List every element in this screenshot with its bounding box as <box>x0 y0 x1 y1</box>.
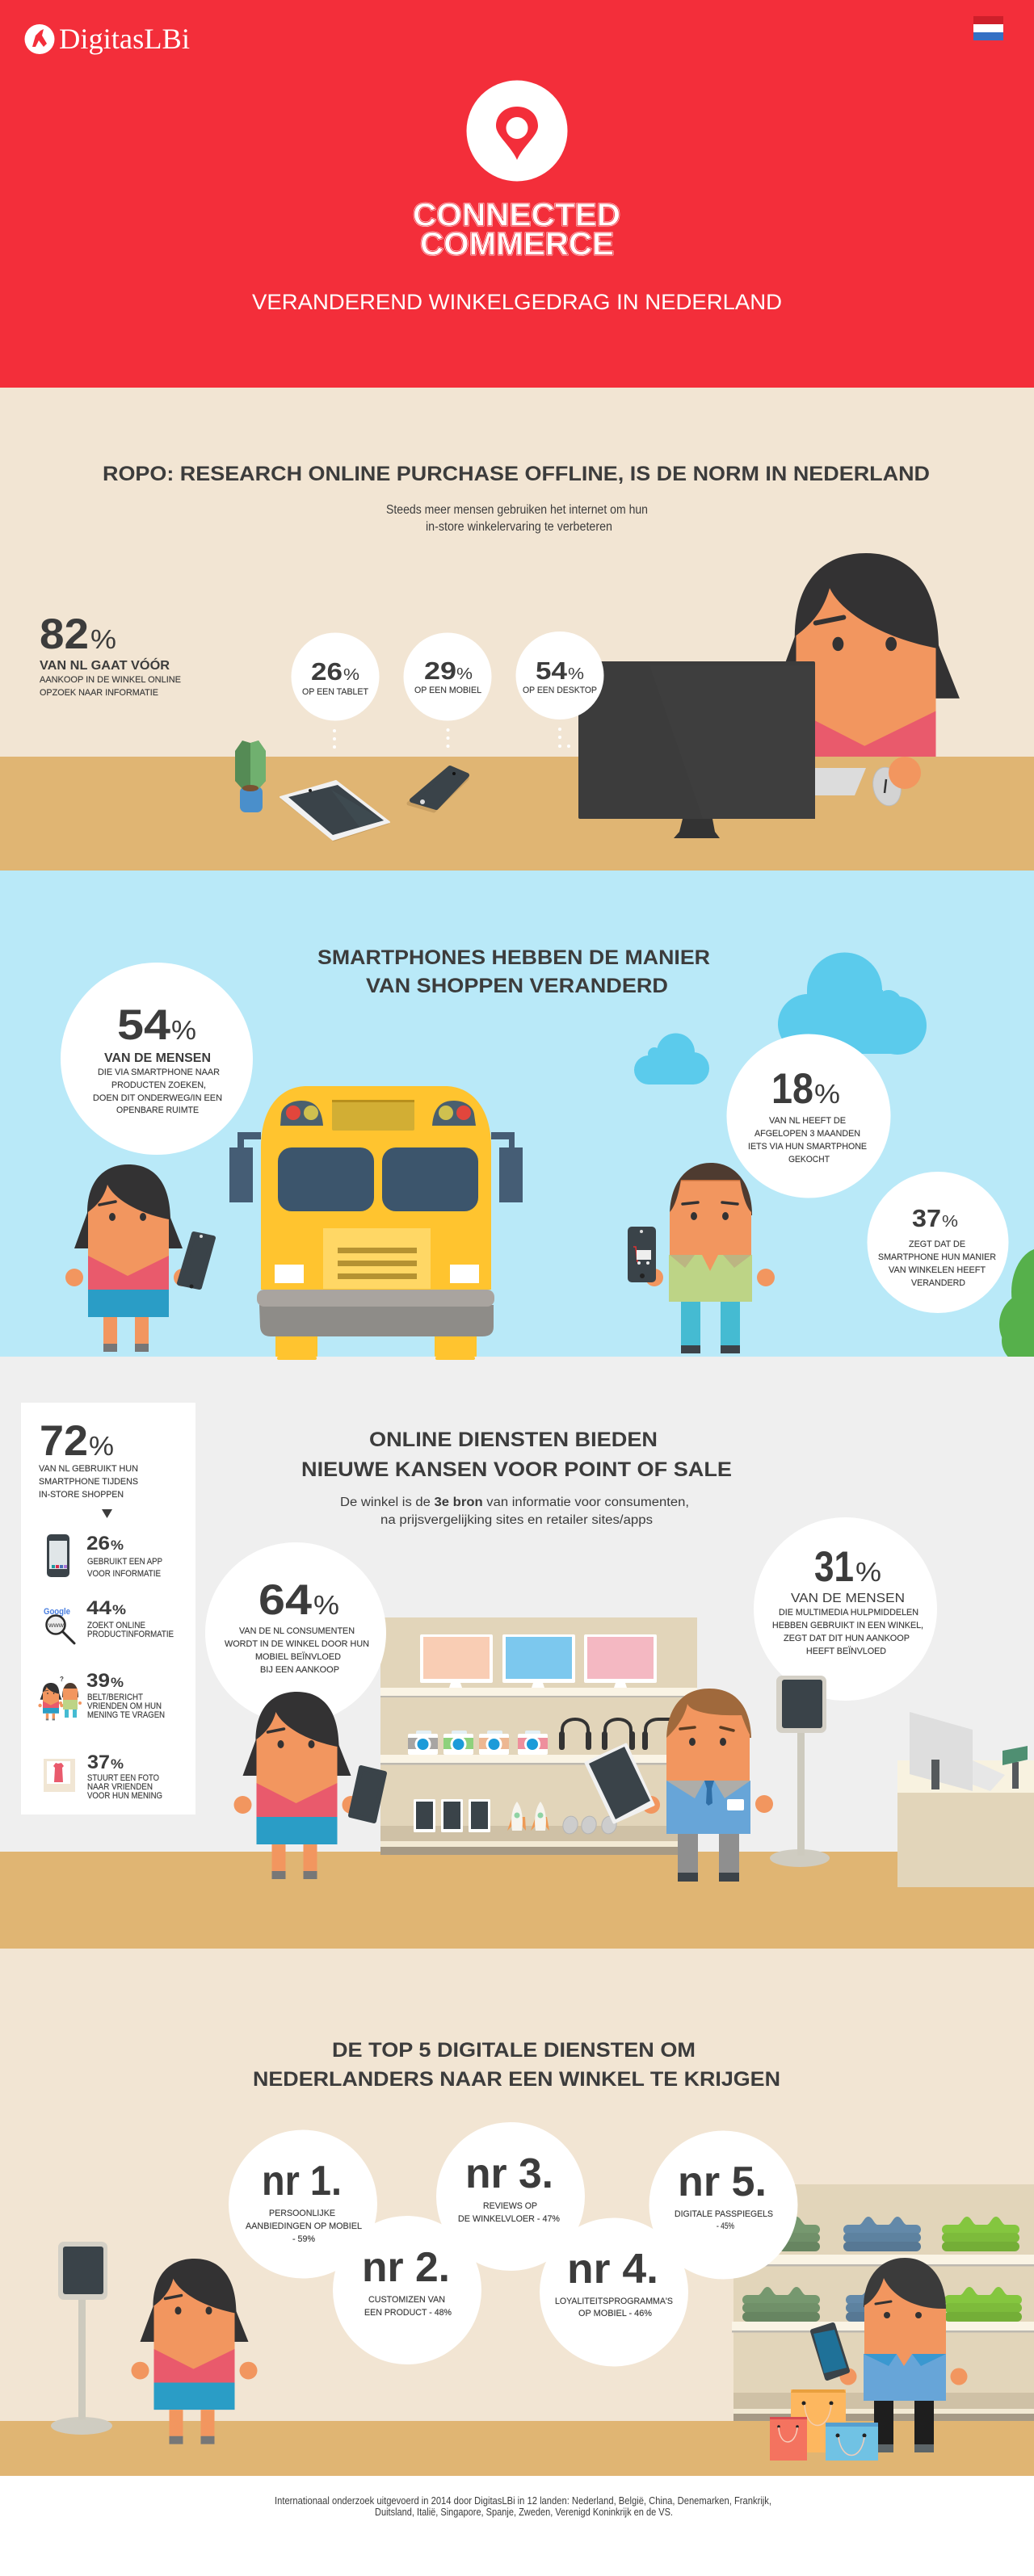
stat: 26% app: GEBRUIKT EEN APP <box>87 1557 162 1567</box>
stat: 72%: IN-STORE SHOPPEN <box>39 1490 124 1500</box>
illustration: woman with phone <box>234 1692 385 1879</box>
stat: 82%: VAN NL GAAT VÓÓR <box>40 658 170 673</box>
stat: 39%: % <box>111 1675 124 1690</box>
section: top 5 <box>0 1949 1034 2476</box>
illustration: woman with phone <box>65 1164 213 1352</box>
bubble: nr 4: LOYALITEITSPROGRAMMA'S <box>555 2297 673 2306</box>
title: Connected Commerce: COMMERCE <box>420 226 614 262</box>
intro text <box>340 1496 689 1527</box>
bubble: nr 3: nr 3. <box>465 2150 553 2197</box>
icon: tablet <box>280 781 389 841</box>
arrow down <box>102 1509 112 1518</box>
stat: 82%: OPZOEK NAAR INFORMATIE <box>40 688 158 698</box>
stat bubble: 31%: DIE MULTIMEDIA HULPMIDDELEN <box>779 1608 918 1617</box>
product: headphones <box>559 1719 672 1750</box>
stat bubble: 54% van de mensen: DOEN DIT ONDERWEG/IN EEN <box>93 1093 222 1103</box>
intro text <box>386 503 648 534</box>
bus wheels overlap <box>277 1357 475 1360</box>
stat: 26% app: VOOR INFORMATIE <box>87 1569 161 1579</box>
stat bubble: 29% mobiel: % <box>456 665 473 683</box>
stat: 37% foto <box>87 1752 162 1801</box>
product: monitors <box>420 1634 657 1688</box>
stat: 44%: ZOEKT ONLINE <box>87 1621 145 1630</box>
stat bubble: 37%: 37 <box>912 1204 941 1232</box>
heading: smartphones <box>317 946 710 997</box>
stat bubble: 64%: 64 <box>258 1576 313 1624</box>
stat: 39%: VRIENDEN OM HUN <box>87 1701 162 1711</box>
stat bubble: 31%: 31 <box>814 1543 854 1591</box>
title: Connected Commerce: COMMERCE <box>420 226 614 262</box>
bubble: nr 4 <box>540 2217 688 2366</box>
stat: 82%: AANKOOP IN DE WINKEL ONLINE <box>40 675 181 685</box>
icon: smartphone <box>409 768 467 811</box>
title: Connected Commerce: CONNECTED <box>413 197 620 233</box>
bubble: nr 2 <box>333 2216 481 2364</box>
stat bubble: 37% <box>868 1172 1008 1313</box>
product: rockets <box>507 1802 549 1831</box>
subtitle: VERANDEREND WINKELGEDRAG IN NEDERLAND <box>252 290 782 314</box>
footer <box>0 2476 1034 2576</box>
stat: 72%: % <box>89 1431 114 1461</box>
section: ROPO <box>0 388 1034 871</box>
icon: small cloud <box>634 1034 709 1085</box>
stat: 37% foto: % <box>111 1756 124 1772</box>
stat: 44%: % <box>112 1602 126 1617</box>
stat bubble: 29% mobiel <box>404 633 491 720</box>
stat: 82% <box>40 610 181 698</box>
stat: 39%: MENING TE VRAGEN <box>87 1710 165 1720</box>
stat bubble: 31%: HEBBEN GEBRUIKT IN EEN WINKEL, <box>772 1621 923 1630</box>
stat bubble: 64%: % <box>313 1590 339 1620</box>
stat: 37% foto: 37 <box>87 1752 110 1773</box>
illustration: woman <box>131 2259 257 2444</box>
icon: large cloud <box>778 953 927 1055</box>
footer: Duitsland, Italië, Singapore, Spanje, Zweden, Verenigd Koninkrijk en de VS. <box>375 2506 673 2518</box>
stat: 37% foto: VOOR HUN MENING <box>87 1791 162 1801</box>
floor <box>0 2421 1034 2476</box>
stat bubble: 18%: IETS VIA HUN SMARTPHONE <box>748 1142 867 1152</box>
icon: couple <box>38 1676 82 1720</box>
icon: phone with cart <box>628 1227 656 1282</box>
bubble: nr 2: nr 2. <box>362 2244 450 2291</box>
bubble: nr 5: - 45% <box>717 2221 734 2231</box>
stat bubble: 31%: HEEFT BEÏNVLOED <box>806 1647 886 1656</box>
desk <box>0 757 1034 871</box>
illustration: keyboard, mouse, hand <box>808 757 921 808</box>
stat: 26% app <box>86 1533 162 1579</box>
stat bubble: 64%: WORDT IN DE WINKEL DOOR HUN <box>225 1639 369 1649</box>
clothing stacks bottom <box>742 2287 1022 2322</box>
bus headlights <box>275 1265 479 1283</box>
heading: top 5 <box>253 2039 780 2091</box>
stat: 72%: 72 <box>40 1417 88 1465</box>
icon: photo of dress <box>44 1759 75 1792</box>
icon: google search <box>44 1607 74 1643</box>
icon: phone held <box>179 1234 213 1289</box>
icon: location pin <box>467 81 567 181</box>
stat bubble: 26% tablet <box>291 633 380 720</box>
stat bubble: 64%: BIJ EEN AANKOOP <box>260 1665 339 1675</box>
stat bubble: 54% desktop <box>515 631 604 720</box>
stat: 39% <box>86 1670 165 1720</box>
stat bubble: 54% van de mensen: PRODUCTEN ZOEKEN, <box>111 1080 206 1090</box>
bus wheels <box>275 1324 477 1360</box>
bubble: nr 3: REVIEWS OP <box>483 2201 537 2211</box>
stat bubble: 37%: VERANDERD <box>911 1278 965 1288</box>
clothing stacks top <box>742 2217 1019 2251</box>
bubble: nr 3: DE WINKELVLOER - 47% <box>458 2214 560 2224</box>
illustration: man with phone <box>628 1163 775 1353</box>
intro text: Steeds meer mensen gebruiken het internet om hun <box>386 503 648 517</box>
illustration: clothing shelves <box>732 2184 1034 2421</box>
stat bubble: 54% van de mensen: % <box>171 1015 196 1045</box>
bubble: nr 5: nr 5. <box>678 2159 767 2205</box>
stat: 44%: PRODUCTINFORMATIE <box>87 1630 174 1639</box>
side panel: 72% <box>21 1403 195 1815</box>
stat bubble: 18%: AFGELOPEN 3 MAANDEN <box>754 1129 860 1139</box>
section: header <box>0 0 1034 388</box>
bubble: nr 1: AANBIEDINGEN OP MOBIEL <box>246 2221 362 2231</box>
stat bubble: 54% van de mensen: VAN DE MENSEN <box>104 1051 211 1065</box>
illustration: checkout counter <box>897 1712 1034 1887</box>
stat: 37% foto: NAAR VRIENDEN <box>87 1782 153 1792</box>
stat bubble: 37%: ZEGT DAT DE <box>909 1240 965 1249</box>
icon: google search: www <box>48 1622 64 1629</box>
icon: phone <box>813 2325 847 2378</box>
illustration: store shelves <box>380 1617 697 1855</box>
stat bubble: 29% mobiel: OP EEN MOBIEL <box>414 686 481 695</box>
icon: google search: Google <box>44 1607 70 1617</box>
stat bubble: 31%: % <box>855 1557 881 1587</box>
stat bubble: 64% <box>205 1542 386 1723</box>
illustration: man with phone and shopping bags <box>770 2258 968 2461</box>
stat: 72%: SMARTPHONE TIJDENS <box>39 1477 138 1487</box>
intro text: na prijsvergelijking sites en retailer sites/apps <box>380 1513 653 1527</box>
product: mice <box>561 1815 619 1836</box>
icon: shopping bags <box>770 2389 878 2461</box>
stat: 44%: 44 <box>86 1597 112 1619</box>
stat bubble: 54% desktop: OP EEN DESKTOP <box>523 686 597 695</box>
illustration: kiosk <box>51 2242 112 2435</box>
heading: smartphones: VAN SHOPPEN VERANDERD <box>366 975 668 997</box>
icon: phone app <box>47 1534 69 1577</box>
icon: Dutch flag <box>973 16 1003 40</box>
illustration: salesman with tablet <box>586 1689 773 1882</box>
product: cameras <box>408 1731 548 1755</box>
icon: cactus <box>235 740 266 812</box>
stat: 82%: % <box>90 624 116 654</box>
stat bubble: 37%: SMARTPHONE HUN MANIER <box>878 1252 996 1262</box>
footer: Internationaal onderzoek uitgevoerd in 2014 door DigitasLBi in 12 landen: Nederland, België, China, Denemarken, Frankrijk, <box>275 2494 771 2507</box>
bus windows <box>278 1147 478 1211</box>
bubble: nr 1 <box>229 2130 377 2279</box>
stat bubble: 64%: MOBIEL BEÏNVLOED <box>255 1652 341 1662</box>
bus mirrors <box>229 1132 523 1202</box>
stat bubble: 54% desktop: 54 <box>536 657 568 685</box>
illustration: school bus <box>229 1086 523 1360</box>
icon: couple: ? <box>60 1676 64 1683</box>
icon: phone held <box>351 1768 385 1821</box>
stat bubble: 31%: ZEGT DAT DIT HUN AANKOOP <box>784 1634 910 1643</box>
icon: tablet held <box>586 1744 654 1823</box>
stat bubble: 54% van de mensen <box>61 963 253 1155</box>
stat bubble: 18%: VAN NL HEEFT DE <box>769 1116 846 1126</box>
bubble: nr 5: DIGITALE PASSPIEGELS <box>675 2209 773 2219</box>
stat bubble: 26% tablet: % <box>343 666 359 684</box>
stat bubble: 26% tablet: OP EEN TABLET <box>302 687 368 697</box>
stat bubble: 31%: VAN DE MENSEN <box>791 1592 905 1605</box>
stat bubble: 31% <box>754 1517 937 1701</box>
logo: DigitasLBi: DigitasLBi <box>59 23 190 55</box>
section: smartphones <box>0 871 1034 1365</box>
stat: 26% app: 26 <box>86 1533 110 1554</box>
stat bubble: 64%: VAN DE NL CONSUMENTEN <box>239 1626 355 1636</box>
bubble: nr 2: EEN PRODUCT - 48% <box>364 2308 452 2318</box>
bubble: nr 2: CUSTOMIZEN VAN <box>368 2295 445 2305</box>
intro text: De winkel is de 3e bron van informatie voor consumenten, <box>340 1496 689 1509</box>
stat bubble: 37%: VAN WINKELEN HEEFT <box>889 1265 986 1275</box>
product: tablets <box>414 1799 490 1832</box>
heading: online diensten <box>301 1429 732 1481</box>
bubble: nr 4: OP MOBIEL - 46% <box>578 2309 652 2318</box>
heading: top 5: NEDERLANDERS NAAR EEN WINKEL TE KRIJGEN <box>253 2068 780 2091</box>
bus lights top <box>280 1101 476 1126</box>
stat: 82%: 82 <box>40 610 89 658</box>
title: Connected Commerce <box>413 197 620 262</box>
bus body <box>261 1086 491 1290</box>
stat bubble: 18%: 18 <box>771 1065 813 1113</box>
stat: 72%: VAN NL GEBRUIKT HUN <box>39 1464 138 1474</box>
illustration: kiosk <box>770 1676 830 1867</box>
icon: bush <box>999 1248 1034 1365</box>
bus grille <box>323 1228 431 1289</box>
title: Connected Commerce: CONNECTED <box>413 197 620 233</box>
stat bubble: 29% mobiel: 29 <box>424 657 456 685</box>
bus bumper <box>257 1290 494 1336</box>
heading: smartphones: SMARTPHONES HEBBEN DE MANIER <box>317 946 710 969</box>
heading: online diensten: NIEUWE KANSEN VOOR POINT OF SALE <box>301 1458 732 1481</box>
bubble: nr 3 <box>436 2122 585 2271</box>
stat: 39%: BELT/BERICHT <box>87 1693 143 1702</box>
stat: 26% app: % <box>111 1538 124 1553</box>
stat: 39%: 39 <box>86 1670 110 1692</box>
stat bubble: 54% van de mensen: 54 <box>117 1001 171 1049</box>
stat bubble: 18%: GEKOCHT <box>788 1155 830 1164</box>
stat bubble: 26% tablet: 26 <box>311 657 343 686</box>
intro text: in-store winkelervaring te verbeteren <box>426 520 612 534</box>
stat bubble: 54% desktop: % <box>568 665 584 683</box>
stat: 72% <box>39 1417 138 1500</box>
bubble: nr 1: - 59% <box>292 2234 315 2244</box>
stat bubble: 18%: % <box>814 1079 840 1109</box>
floor <box>0 1852 1034 1949</box>
heading: ROPO: ROPO: RESEARCH ONLINE PURCHASE OFFLINE, IS DE NORM IN NEDERLAND <box>103 463 930 485</box>
section: online diensten <box>0 1357 1034 1949</box>
stat bubble: 37%: % <box>942 1213 958 1231</box>
bubble: nr 5 <box>649 2130 798 2279</box>
bus destination sign <box>332 1100 414 1131</box>
stat: 44% <box>86 1597 174 1639</box>
stat bubble: 18% <box>727 1034 890 1198</box>
stat: 37% foto: STUURT EEN FOTO <box>87 1773 159 1783</box>
bubble: nr 4: nr 4. <box>567 2246 658 2293</box>
bubble: nr 1: nr 1. <box>262 2158 342 2205</box>
dotted connectors <box>333 728 570 749</box>
illustration: computer monitor <box>578 661 815 838</box>
stat bubble: 54% van de mensen: OPENBARE RUIMTE <box>116 1105 199 1115</box>
illustration: woman behind desk <box>772 553 960 770</box>
stat bubble: 54% van de mensen: DIE VIA SMARTPHONE NAAR <box>98 1068 220 1077</box>
heading: online diensten: ONLINE DIENSTEN BIEDEN <box>369 1429 658 1451</box>
bubble: nr 1: PERSOONLIJKE <box>269 2209 335 2218</box>
heading: top 5: DE TOP 5 DIGITALE DIENSTEN OM <box>332 2039 696 2062</box>
